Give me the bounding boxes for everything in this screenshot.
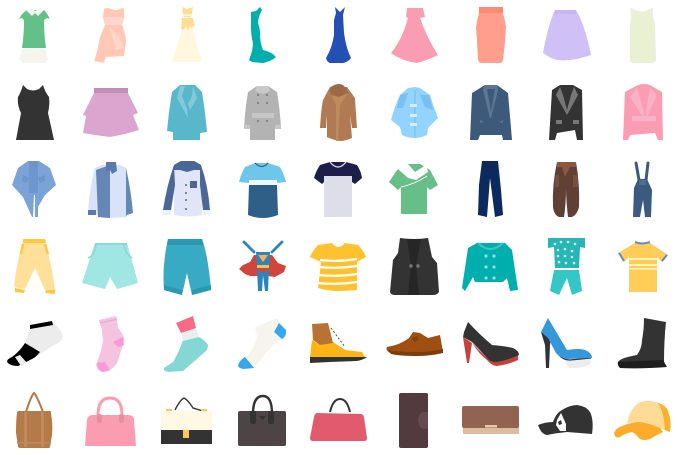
icon: tan tote bag — [16, 393, 52, 448]
icon: pale green sleeveless dress — [630, 8, 656, 63]
icon: red handbag — [310, 399, 367, 441]
icon: black tank dress — [16, 85, 54, 140]
icon: blue gown — [326, 7, 351, 63]
icon: black ankle boot — [618, 318, 667, 368]
icon: white sock with blue heel and toe — [238, 318, 286, 369]
icon: green and white polo — [389, 164, 438, 214]
icon: yellow sweatpants — [14, 239, 55, 294]
icon: blue colour-block tee — [239, 163, 286, 218]
icon: grey trench coat — [244, 86, 281, 140]
icon: black vest — [390, 238, 439, 295]
icon: dark grey handbag — [238, 396, 286, 446]
icon: coral pencil skirt — [476, 7, 506, 63]
icon: yellow baseball cap — [614, 401, 671, 440]
icon: blue shawl top — [12, 161, 56, 217]
icon: teal buttoned jacket — [462, 243, 518, 291]
icon: pink handbag — [85, 398, 136, 446]
icon: teal sock with pink cuff — [164, 316, 208, 372]
icon: mint shorts — [82, 243, 138, 289]
icon: black cap with floral print — [538, 405, 593, 435]
icon: black and red platform heel — [463, 322, 519, 366]
icon: pink sock — [96, 316, 124, 372]
icon: superhero costume — [239, 242, 286, 291]
icon: black and white ankle sock — [7, 321, 63, 366]
icon: teal mermaid dress — [249, 7, 276, 63]
icon: two-tone blue shirt — [88, 162, 133, 218]
icon: green dress — [18, 8, 51, 63]
icon: pink gown — [391, 8, 438, 63]
icon: brown trousers — [553, 162, 579, 217]
icon: yellow striped tee — [310, 243, 366, 291]
icon: cream and black handbag — [161, 398, 212, 444]
icon: blue stiletto — [541, 318, 592, 368]
icon: brown clutch — [462, 406, 519, 434]
icon: white and navy shirt — [163, 161, 210, 216]
icon: light blue cape coat — [391, 87, 438, 138]
icon: patterned shirt and trousers set — [548, 238, 585, 295]
icon: peach dress — [94, 8, 126, 63]
icon: lavender skirt — [543, 10, 591, 60]
icon: teal coat — [167, 85, 207, 140]
icon: navy jeans — [478, 161, 503, 217]
icon: brown lace-up shoe — [386, 332, 443, 356]
icon: yellow tee with blue trim — [618, 242, 668, 292]
icon: navy and grey tee — [314, 162, 362, 217]
icon: yellow and brown work boot — [310, 323, 367, 363]
icon: cream gown — [172, 7, 202, 62]
icon: black blazer — [549, 85, 583, 140]
icon: pink blazer — [623, 84, 663, 140]
icon: navy blazer — [470, 85, 512, 140]
icon: pink tiered skirt — [83, 88, 139, 137]
icon: plum wallet — [399, 393, 428, 448]
icon: blue shorts — [164, 239, 211, 295]
icon: brown coat — [320, 84, 357, 141]
icon: denim overalls — [633, 163, 652, 217]
